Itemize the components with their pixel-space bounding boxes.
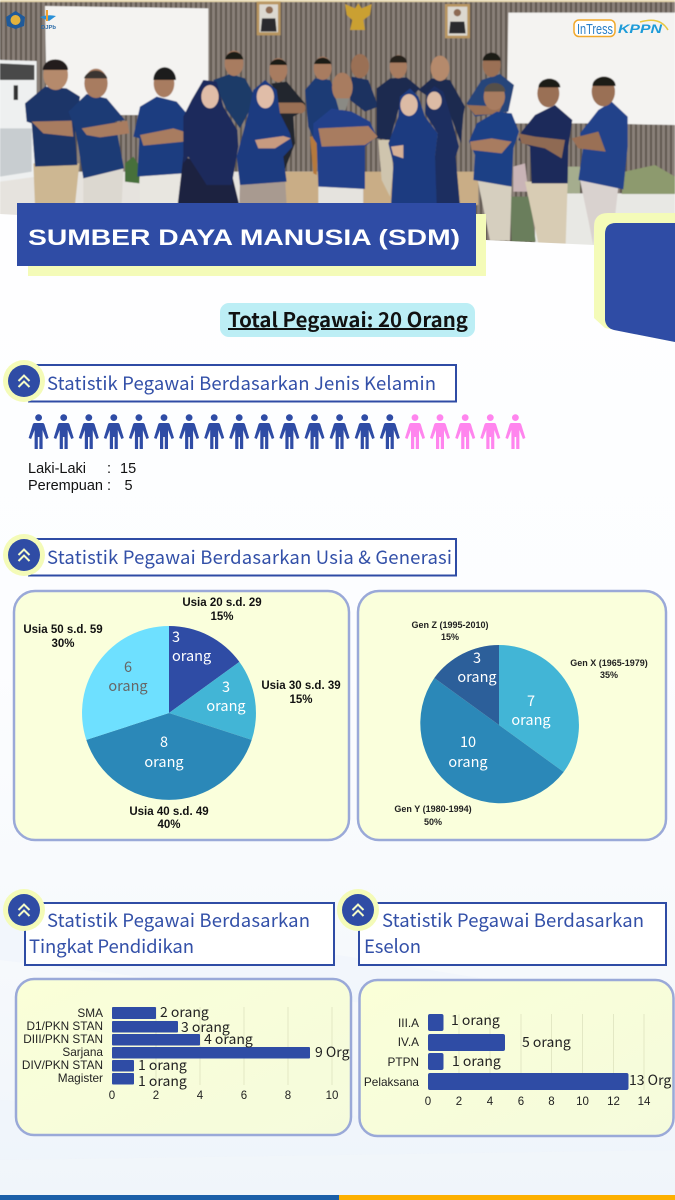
- panel: age pie chart: 8: [160, 731, 168, 752]
- person 3: [140, 173, 180, 205]
- person 13: [318, 186, 364, 203]
- panel: echelon bar chart: PTPN: [388, 1055, 419, 1069]
- panel: education bar chart: 8: [285, 1090, 291, 1102]
- panel: generation pie chart: orang: [511, 709, 551, 730]
- panel: age pie chart: 3: [222, 676, 230, 697]
- panel: echelon bar chart: 0: [425, 1096, 431, 1108]
- panel: generation pie chart: Gen X (1965-1979): [570, 658, 648, 668]
- person 5: [238, 181, 287, 203]
- heading: echelon: Statistik Pegawai Berdasarkan: [382, 907, 644, 933]
- panel: education bar chart: 10: [326, 1090, 338, 1102]
- heading: gender: Statistik Pegawai Berdasarkan Jenis Kelamin: [47, 370, 436, 396]
- panel: age pie chart: 15%: [289, 694, 313, 706]
- panel: generation pie chart: Gen Z (1995-2010): [411, 620, 489, 630]
- heading: gender: [3, 360, 456, 402]
- panel: education bar chart: 0: [109, 1090, 115, 1102]
- panel: echelon bar chart: 2: [456, 1096, 462, 1108]
- photo: group of staff: [0, 0, 675, 252]
- panel: age pie chart: 6: [124, 656, 132, 677]
- panel: generation pie chart: 35%: [600, 670, 618, 680]
- logos top right: InTress KPPN: InTress: [577, 21, 613, 38]
- panel: generation pie chart: 10: [460, 731, 476, 752]
- panel: generation pie chart: [358, 591, 666, 840]
- panel: echelon bar chart: 8: [548, 1096, 555, 1108]
- decorative corner panel: [594, 213, 675, 342]
- panel: age pie chart: orang: [108, 675, 148, 696]
- footer color bar: [0, 1195, 675, 1200]
- pictogram: 15 male, 5 female: [29, 414, 525, 449]
- panel: age pie chart: 40%: [157, 819, 181, 831]
- panel: age pie chart: 3: [172, 626, 180, 647]
- panel: age pie chart: orang: [206, 695, 246, 716]
- panel: age pie chart: orang: [172, 645, 211, 666]
- panel: age pie chart: orang: [144, 751, 184, 772]
- panel: generation pie chart: orang: [457, 666, 497, 687]
- panel: education bar chart: D1/PKN STAN: [27, 1019, 103, 1033]
- gender counts: Perempuan :: [28, 478, 111, 494]
- panel: education bar chart: 1 orang: [138, 1055, 187, 1075]
- panel: echelon bar chart: 1 orang: [452, 1051, 501, 1071]
- panel: echelon bar chart: 14: [638, 1096, 651, 1108]
- gender counts: :: [107, 461, 111, 477]
- person 14: [388, 88, 438, 205]
- heading: echelon: Eselon: [364, 933, 421, 959]
- panel: education bar chart: DIII/PKN STAN: [23, 1032, 103, 1046]
- panel: age pie chart: 15%: [210, 611, 234, 623]
- heading: education: Statistik Pegawai Berdasarkan: [47, 907, 310, 933]
- panel: echelon bar chart: 1 orang: [451, 1010, 500, 1030]
- back row left: [213, 74, 253, 128]
- panel: age pie chart: Usia 50 s.d. 59: [23, 624, 103, 636]
- total employees pill: Total Pegawai: 20 Orang: [228, 304, 468, 333]
- person 15: [425, 86, 460, 205]
- panel: echelon bar chart: III.A: [398, 1016, 419, 1030]
- panel: generation pie chart: Gen Y (1980-1994): [394, 804, 472, 814]
- panel: age pie chart: 30%: [51, 638, 75, 650]
- panel: education bar chart: SMA: [77, 1006, 103, 1020]
- panel: generation pie chart: 15%: [441, 632, 459, 642]
- panel: echelon bar chart: 6: [518, 1096, 524, 1108]
- panel: education bar chart: 4 orang: [204, 1029, 253, 1049]
- logos top right: InTress KPPN: KPPN: [618, 22, 662, 36]
- panel: education bar chart: 1 orang: [138, 1071, 187, 1091]
- panel: education bar chart: 4: [197, 1090, 204, 1102]
- heading: age and generation: Statistik Pegawai Berdasarkan Usia & Generasi: [47, 544, 452, 570]
- gender counts: 5: [124, 478, 133, 494]
- title banner: SUMBER DAYA MANUSIA (SDM): [28, 225, 460, 250]
- logos top left: DJPb: [41, 25, 57, 31]
- panel: generation pie chart: 3: [473, 647, 481, 668]
- panel: generation pie chart: 50%: [424, 817, 442, 827]
- logos top right: InTress KPPN: [574, 20, 668, 38]
- panel: echelon bar chart: [360, 980, 674, 1136]
- right half of photo: [313, 3, 675, 250]
- panel: education bar chart: Sarjana: [62, 1045, 103, 1059]
- panel: education bar chart: Magister: [58, 1071, 103, 1085]
- background streaks: [0, 900, 675, 1160]
- panel: echelon bar chart: IV.A: [398, 1035, 419, 1049]
- gender counts: [28, 461, 136, 494]
- panel: education bar chart: [16, 979, 351, 1135]
- panel: education bar chart: 2 orang: [160, 1002, 209, 1022]
- panel: generation pie chart: 7: [527, 690, 535, 711]
- person 18: [580, 180, 618, 246]
- heading: education: Tingkat Pendidikan: [29, 933, 194, 959]
- panel: echelon bar chart: 12: [607, 1096, 620, 1108]
- person 1: [33, 163, 79, 205]
- person 4: [178, 157, 239, 205]
- panel: generation pie chart: orang: [448, 751, 488, 772]
- panel: echelon bar chart: 13 Org: [629, 1070, 671, 1090]
- person 17: [525, 182, 568, 244]
- panel: echelon bar chart: 10: [576, 1096, 589, 1108]
- panel: education bar chart: 6: [241, 1090, 247, 1102]
- panel: education bar chart: 3 orang: [181, 1017, 230, 1037]
- panel: education bar chart: 2: [153, 1090, 159, 1102]
- person 16: [478, 180, 512, 241]
- panel: age pie chart: Usia 40 s.d. 49: [129, 806, 209, 818]
- gender counts: Laki-Laki: [28, 461, 86, 477]
- gender counts: 15: [120, 461, 136, 477]
- left half of photo: [0, 1, 340, 215]
- heading: age and generation: [3, 534, 456, 576]
- panel: echelon bar chart: 4: [487, 1096, 494, 1108]
- panel: age pie chart: Usia 20 s.d. 29: [182, 597, 262, 609]
- title banner: [17, 203, 486, 276]
- panel: education bar chart: 9 Org: [315, 1042, 350, 1062]
- person 2: [83, 168, 123, 205]
- panel: echelon bar chart: 5 orang: [522, 1032, 571, 1052]
- panel: age pie chart: [14, 591, 349, 840]
- heading: education: [3, 889, 334, 965]
- panel: age pie chart: Usia 30 s.d. 39: [261, 680, 341, 692]
- panel: echelon bar chart: Pelaksana: [364, 1075, 419, 1089]
- panel: education bar chart: DIV/PKN STAN: [22, 1058, 103, 1072]
- back row right: [350, 77, 378, 112]
- logos top left: [6, 10, 57, 31]
- heading: echelon: [337, 889, 666, 965]
